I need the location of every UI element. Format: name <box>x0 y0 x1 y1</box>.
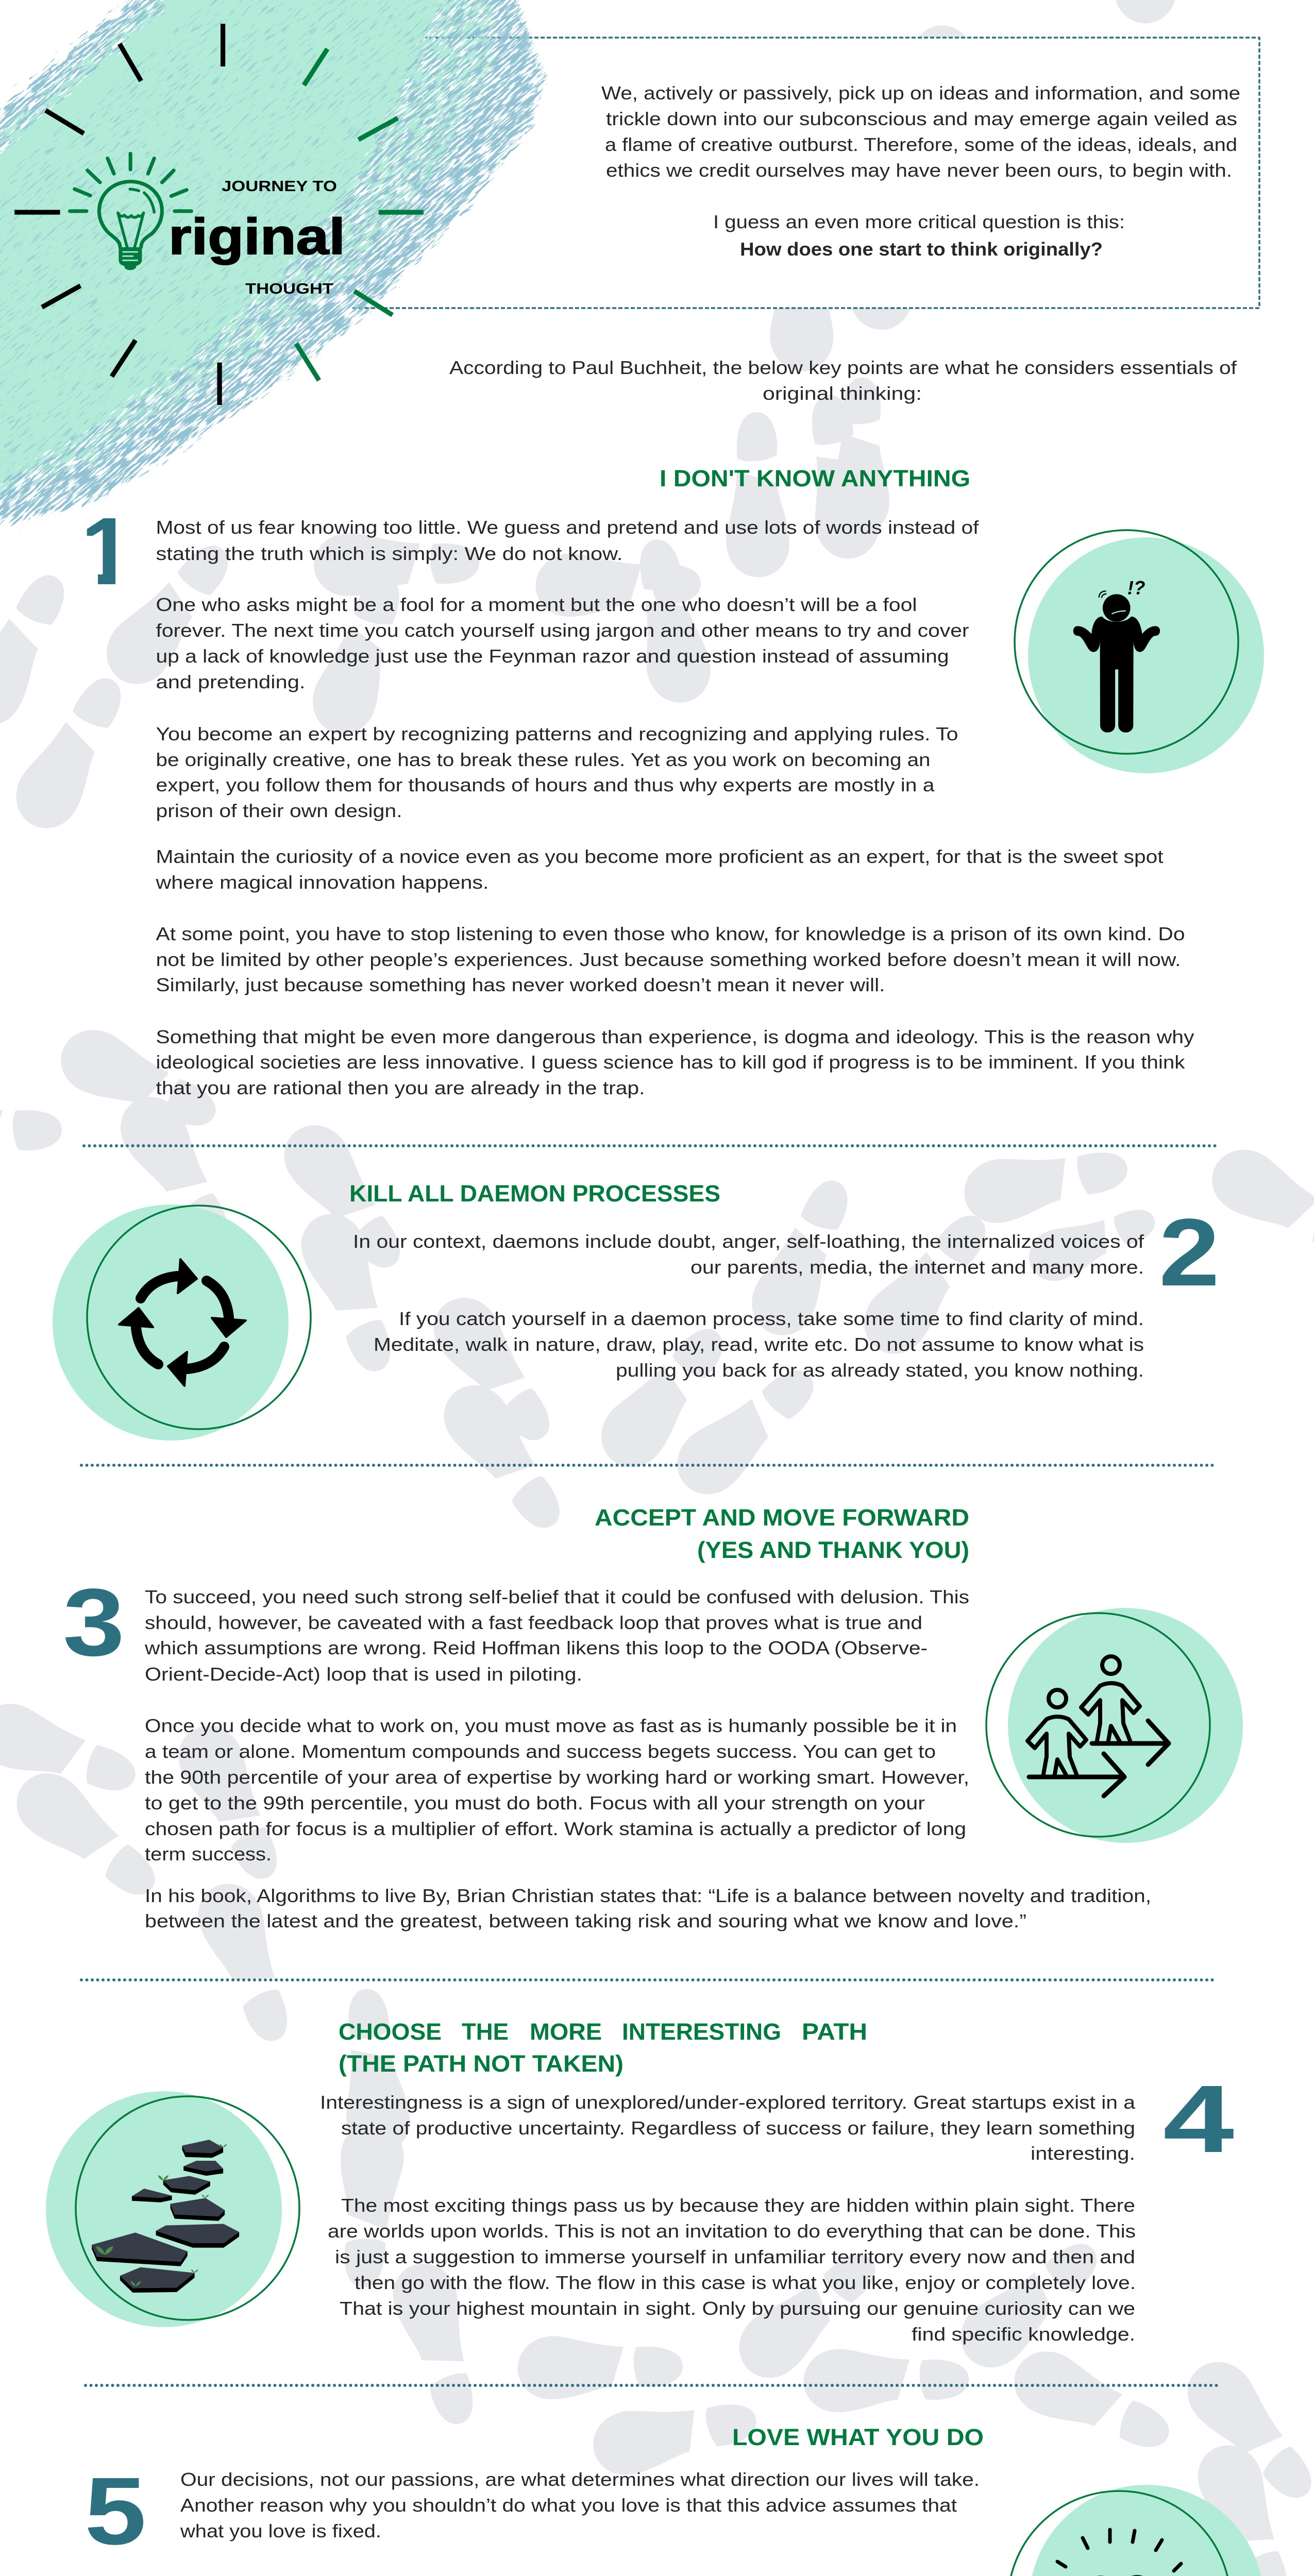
body text 4: state of productive uncertainty. Regardless of success or failure, they learn something <box>341 2117 1135 2139</box>
body text 3: the 90th percentile of your area of expertise by working hard or working smart. However, <box>145 1767 969 1788</box>
body text 5: Another reason why you shouldn’t do what you love is that this advice assumes that <box>180 2495 957 2516</box>
body text 3: To succeed, you need such strong self-belief that it could be confused with delusion. This <box>145 1586 969 1607</box>
body text 2: our parents, media, the internet and many more. <box>690 1257 1144 1278</box>
body text 4: are worlds upon worlds. This is not an invitation to do everything that can be done. This <box>328 2221 1136 2242</box>
heading 3: (YES AND THANK YOU) <box>697 1537 969 1563</box>
body text 1: not be limited by other people’s experiences. Just because something worked before doesn’t mean it will now. <box>156 949 1181 970</box>
icon: heart <box>1008 2485 1264 2576</box>
body text 2 <box>353 1231 1144 1381</box>
body text 3: to get to the 99th percentile, you must do both. Focus with all your strength on your <box>145 1792 925 1814</box>
body text 3: chosen path for focus is a multiplier of effort. Work stamina is actually a predictor of long <box>145 1818 966 1839</box>
heading 4: CHOOSE <box>339 2019 442 2045</box>
intro paragraph: According to Paul Buchheit, the below key points are what he considers essentials of <box>449 357 1237 378</box>
body text 1: One who asks might be a fool for a moment but the one who doesn’t will be a fool <box>156 594 917 615</box>
intro paragraph: ethics we credit ourselves may have never been ours, to begin with. <box>606 160 1232 181</box>
heading 4: THE <box>462 2019 509 2045</box>
heading 4: INTERESTING <box>622 2019 781 2045</box>
number 4: 4 <box>1163 2066 1234 2173</box>
body text 1 <box>155 517 1194 1098</box>
number 5: 5 <box>85 2458 146 2565</box>
sunburst rays <box>14 24 424 405</box>
intro paragraph: How does one start to think originally? <box>740 239 1103 260</box>
body text 3: term success. <box>145 1843 272 1865</box>
icon: confused person: !? <box>1127 578 1145 599</box>
divider 3 <box>81 1978 1216 1981</box>
icon: confused person <box>1015 530 1264 773</box>
logo: journey to original thought: JOURNEY TO <box>222 178 337 195</box>
body text 3: Orient-Decide-Act) loop that is used in piloting. <box>145 1664 582 1685</box>
divider 4 <box>86 2384 1219 2387</box>
intro text box <box>352 38 1259 308</box>
panel: section 3 <box>63 1504 1243 1931</box>
body text 4: then go with the flow. The flow in this case is what you like, enjoy or completely love. <box>355 2272 1136 2293</box>
body text 1: ideological societies are less innovative. I guess science has to kill god if progress is to be imminent. If you think <box>156 1052 1186 1073</box>
icon: stepping stones <box>46 2091 299 2327</box>
icon: cycle arrows <box>53 1205 311 1440</box>
body text 1: that you are rational then you are already in the trap. <box>156 1077 645 1098</box>
body text 1: up a lack of knowledge just use the Feynman razor and question instead of assuming <box>156 646 949 667</box>
heading 2: KILL ALL DAEMON PROCESSES <box>349 1180 720 1207</box>
body text 3: should, however, be caveated with a fast feedback loop that proves what is true and <box>145 1612 922 1633</box>
logo: journey to original thought: riginal <box>169 208 345 265</box>
body text 3 <box>144 1586 1151 1931</box>
body text 1: where magical innovation happens. <box>155 872 489 893</box>
body text 2: In our context, daemons include doubt, anger, self-loathing, the internalized voices of <box>353 1231 1144 1252</box>
intro paragraph <box>449 82 1240 404</box>
divider 2 <box>81 1464 1216 1467</box>
number 3: 3 <box>63 1569 125 1676</box>
body text 3: which assumptions are wrong. Reid Hoffman likens this loop to the OODA (Observe- <box>144 1637 928 1658</box>
logo: journey to original thought <box>14 24 424 405</box>
heading 4: (THE PATH NOT TAKEN) <box>339 2050 624 2077</box>
body text 4: interesting. <box>1031 2143 1135 2164</box>
heading 4: MORE <box>530 2019 602 2045</box>
body text 5 <box>175 2469 1176 2576</box>
intro paragraph: We, actively or passively, pick up on ideas and information, and some <box>601 82 1240 104</box>
body text 4: find specific knowledge. <box>912 2324 1135 2345</box>
body text 4: is just a suggestion to immerse yourself in unfamiliar territory every now and then and <box>335 2246 1135 2267</box>
body text 4: That is your highest mountain in sight. Only by pursuing our genuine curiosity can we <box>340 2298 1135 2319</box>
logo: journey to original thought: THOUGHT <box>245 281 333 297</box>
body text 3: In his book, Algorithms to live By, Brian Christian states that: “Life is a balance between novelty and tradition, <box>145 1885 1151 1906</box>
body text 4 <box>320 2092 1136 2345</box>
panel: section 4 <box>46 2019 1234 2345</box>
heading 3: ACCEPT AND MOVE FORWARD <box>595 1504 969 1531</box>
heading 1: I DON'T KNOW ANYTHING <box>660 465 970 492</box>
heading 4 <box>339 2019 867 2077</box>
brush stroke: top left <box>0 0 819 806</box>
heading 4: PATH <box>802 2019 867 2045</box>
intro paragraph: I guess an even more critical question is this: <box>713 211 1125 232</box>
heading 3 <box>595 1504 969 1563</box>
body text 1: Something that might be even more dangerous than experience, is dogma and ideology. This is the reason why <box>156 1026 1194 1047</box>
body text 2: pulling you back for as already stated, you know nothing. <box>616 1360 1144 1381</box>
body text 4: Interestingness is a sign of unexplored/under-explored territory. Great startups exist in a <box>320 2092 1136 2113</box>
body text 1: Most of us fear knowing too little. We guess and pretend and use lots of words instead of <box>156 517 980 538</box>
panel: section 2 <box>53 1180 1220 1440</box>
body text 3: Once you decide what to work on, you must move as fast as is humanly possible be it in <box>145 1715 957 1736</box>
intro paragraph: a flame of creative outburst. Therefore, some of the ideas, ideals, and <box>605 134 1237 155</box>
body text 1: You become an expert by recognizing patterns and recognizing and applying rules. To <box>156 723 958 744</box>
icon: light bulb <box>70 154 191 270</box>
body text 2: Meditate, walk in nature, draw, play, read, write etc. Do not assume to know what is <box>374 1334 1144 1355</box>
panel: section 5 <box>85 2424 1264 2576</box>
body text 1: be originally creative, one has to break these rules. Yet as you work on becoming an <box>156 749 931 770</box>
panel: section 1 <box>80 465 1264 1098</box>
body text 4: The most exciting things pass us by because they are hidden within plain sight. There <box>341 2195 1135 2216</box>
body text 2: If you catch yourself in a daemon process, take some time to find clarity of mind. <box>399 1308 1144 1329</box>
body text 1: forever. The next time you catch yourself using jargon and other means to try and cover <box>156 620 969 641</box>
body text 1: and pretending. <box>156 671 305 692</box>
heading 5: LOVE WHAT YOU DO <box>732 2424 984 2450</box>
body text 3: a team or alone. Momentum compounds and success begets success. You can get to <box>145 1741 936 1762</box>
body text 5: what you love is fixed. <box>180 2520 381 2541</box>
intro paragraph: trickle down into our subconscious and may emerge again veiled as <box>606 108 1237 129</box>
number 2: 2 <box>1159 1199 1220 1306</box>
divider 1 <box>84 1144 1219 1147</box>
body text 1: stating the truth which is simply: We do not know. <box>156 543 622 564</box>
body text 1: Maintain the curiosity of a novice even as you become more proficient as an expert, for that is the sweet spot <box>156 846 1164 867</box>
body text 1: prison of their own design. <box>156 800 402 821</box>
intro paragraph: original thinking: <box>763 383 922 404</box>
icon: people walking forward <box>986 1608 1243 1843</box>
body text 1: At some point, you have to stop listening to even those who know, for knowledge is a prison of its own kind. Do <box>156 923 1185 944</box>
body text 1: expert, you follow them for thousands of hours and thus why experts are mostly in a <box>156 774 935 795</box>
number 1: 1 <box>80 498 133 605</box>
body text 1: Similarly, just because something has never worked doesn’t mean it never will. <box>156 974 885 995</box>
body text 5: Our decisions, not our passions, are what determines what direction our lives will take. <box>180 2469 980 2490</box>
body text 3: between the latest and the greatest, between taking risk and souring what we know and love.” <box>145 1910 1026 1931</box>
